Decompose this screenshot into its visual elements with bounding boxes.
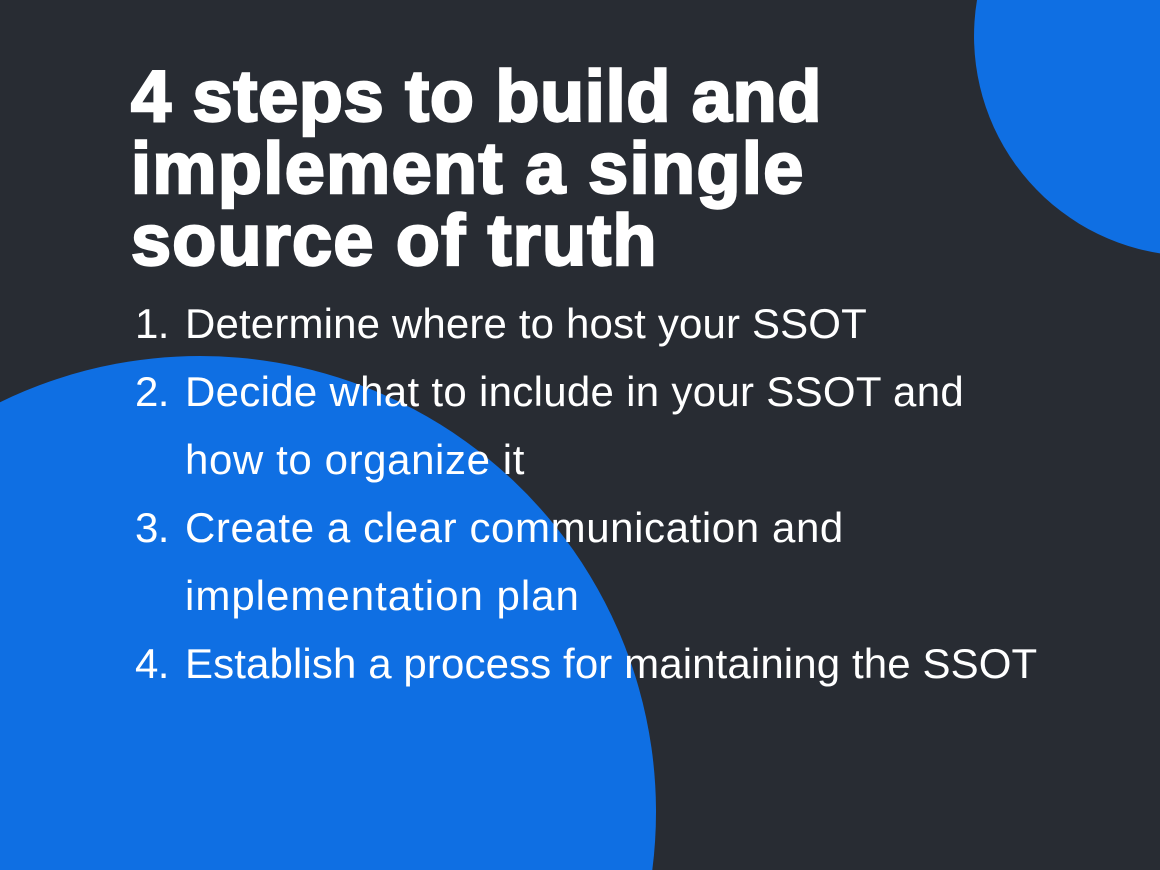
decorative circle: bottom left [0, 356, 656, 870]
decorative circle: top right [974, 0, 1160, 253]
title [130, 57, 822, 281]
step 3: 3. [135, 504, 169, 551]
step 2: Decide what to include in your SSOT and [185, 368, 964, 415]
step 3: Create a clear communication and [185, 504, 844, 551]
step 4: 4. [135, 640, 169, 687]
step 1: Determine where to host your SSOT [185, 300, 867, 347]
step 3 [135, 504, 844, 619]
title: source of truth [131, 201, 658, 281]
numbered list of steps [135, 300, 1037, 687]
step 1: 1. [135, 300, 169, 347]
title: implement a single [131, 129, 805, 209]
step 3: implementation plan [185, 572, 580, 619]
step 2: 2. [135, 368, 169, 415]
step 2: how to organize it [185, 436, 525, 483]
step 2 [135, 368, 964, 483]
step 4: Establish a process for maintaining the SSOT [185, 640, 1037, 687]
title: 4 steps to build and [131, 57, 822, 137]
